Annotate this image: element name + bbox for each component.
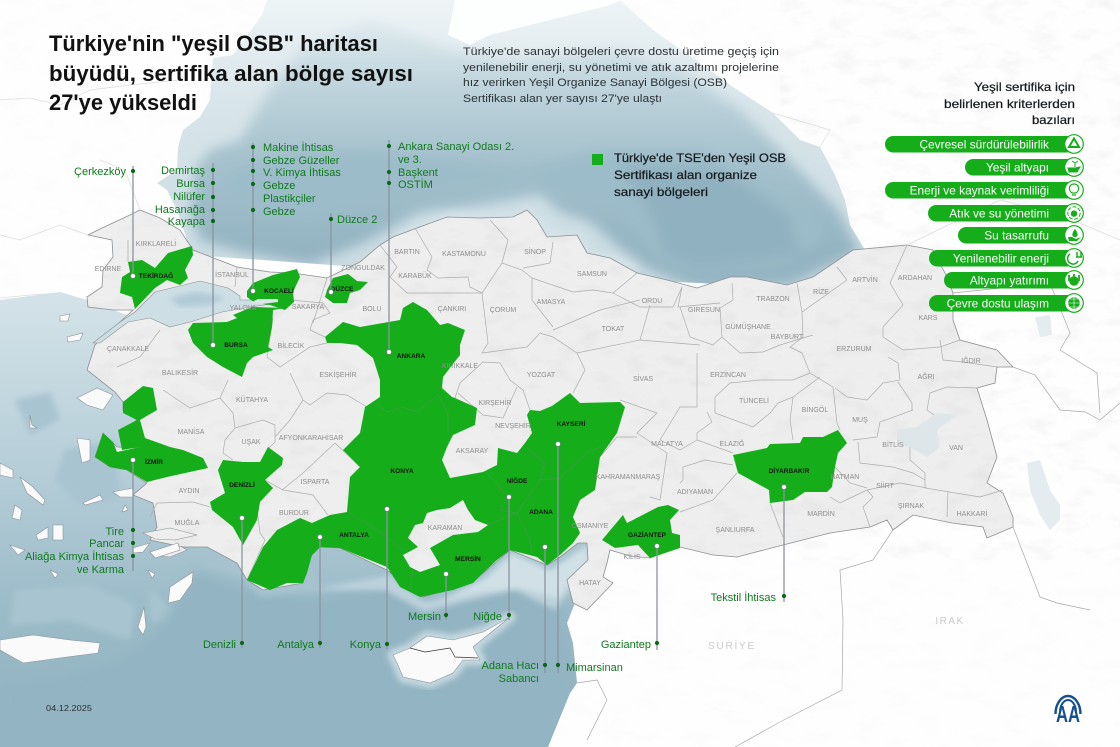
province names: MUŞ: [852, 417, 868, 424]
province names: MARDİN: [807, 509, 835, 518]
province names: NEVŞEHİR: [495, 421, 531, 430]
pill: Çevresel sürdürülebilirlik: [885, 135, 1083, 153]
intro text: yenilenebilir enerji, su yönetimi ve atık azaltımı projelerine: [463, 62, 779, 74]
pill: Çevre dostu ulaşım: [929, 294, 1083, 312]
province names: BATMAN: [831, 474, 859, 481]
province names: İSTANBUL: [215, 270, 249, 279]
pill: Yenilenebilir enerji: Yenilenebilir enerji: [953, 251, 1049, 265]
sea: Black Sea: [157, 0, 865, 290]
province names: AYDIN: [179, 488, 199, 495]
province names: UŞAK: [241, 439, 261, 446]
faint regional borders: [0, 80, 1120, 298]
OSB name labels: Demirtaş: [161, 165, 205, 177]
province location markers: [130, 274, 786, 576]
province names: SİNOP: [524, 247, 546, 256]
province names: ŞIRNAK: [898, 503, 924, 510]
OSB name labels: Kayapa: [168, 216, 206, 228]
province names: ÇORUM: [490, 307, 516, 314]
intro text: hız verirken Yeşil Organize Sanayi Bölgesi (OSB): [463, 77, 727, 89]
criteria heading: bazıları: [1032, 113, 1075, 127]
province names: ÇANAKKALE: [107, 346, 149, 353]
province names: BİLECİK: [278, 341, 305, 350]
province names: ARDAHAN: [898, 275, 932, 282]
logo: Anadolu Ajansı: AA: [1056, 701, 1080, 727]
province names: BAYBURT: [771, 334, 804, 341]
province: Düzce: [325, 274, 368, 303]
province names: OSMANİYE: [572, 521, 609, 530]
province names: KIRŞEHİR: [478, 398, 512, 407]
intro text: Türkiye'de sanayi bölgeleri çevre dostu üretime geçiş için: [463, 46, 779, 58]
pill: Altyapı yatırımı: Altyapı yatırımı: [970, 273, 1049, 287]
OSB name labels: Plastikçiler: [263, 193, 316, 205]
sea: Aegean and Mediterranean: [0, 292, 600, 747]
title: [49, 31, 413, 115]
OSB name labels: Gebze: [263, 180, 295, 192]
certified province labels: MERSİN: [455, 555, 481, 563]
province names: TUNCELİ: [739, 396, 769, 405]
pill: Atık ve su yönetimi: [928, 204, 1083, 222]
pill: Yenilenebilir enerji: [929, 249, 1083, 267]
province names: TRABZON: [756, 296, 790, 303]
province names: HATAY: [579, 580, 601, 587]
province: Diyarbakır: [733, 430, 847, 503]
neighbouring country borders: [577, 283, 1120, 747]
province: İzmir: [95, 386, 208, 482]
OSB name labels: Antalya: [277, 639, 315, 651]
pill: Altyapı yatırımı: [944, 271, 1083, 289]
OSB name labels: [25, 141, 776, 685]
Karaman label and inner borders: [250, 299, 600, 590]
province names: ERZURUM: [836, 346, 872, 353]
OSB name labels: Düzce 2: [337, 214, 377, 226]
OSB name labels: Konya: [350, 639, 382, 651]
OSB name labels: Tekstil İhtisas: [711, 591, 776, 604]
province: Bursa: [188, 307, 285, 377]
pill: Yeşil altyapı: Yeşil altyapı: [986, 160, 1049, 174]
OSB name labels: Başkent: [398, 167, 438, 179]
province names: BOLU: [362, 306, 382, 313]
province names: AKSARAY: [456, 448, 489, 455]
province: Kocaeli: [247, 269, 300, 310]
province names: AMASYA: [537, 299, 566, 306]
certified province labels: GAZİANTEP: [628, 531, 667, 539]
land: Türkiye base map: [86, 210, 1014, 610]
pill: Çevresel sürdürülebilirlik: Çevresel sürdürülebilirlik: [919, 137, 1049, 151]
province names: IRAK: [935, 616, 965, 627]
certified province labels: NİĞDE: [507, 476, 528, 485]
OSB name labels: Tire: [105, 526, 124, 538]
province names: SAMSUN: [577, 271, 607, 278]
OSB name labels: Mimarsinan: [566, 662, 623, 674]
pill: Su tasarrufu: Su tasarrufu: [984, 228, 1049, 242]
OSB name labels: Mersin: [408, 611, 441, 623]
intro text: [463, 46, 779, 105]
province names: BİNGÖL: [802, 405, 828, 414]
sea of Marmara: [93, 281, 280, 343]
province names: ARTVİN: [852, 275, 878, 284]
province names: SİİRT: [876, 481, 895, 490]
province names: BURDUR: [279, 510, 309, 517]
province names: KİLİS: [623, 552, 641, 561]
OSB name labels: V. Kimya İhtisas: [263, 166, 341, 179]
province names: ERZİNCAN: [710, 370, 746, 379]
province names: HAKKARİ: [957, 509, 987, 518]
logo: Anadolu Ajansı: [1056, 696, 1080, 727]
OSB name labels: Niğde: [473, 611, 502, 623]
province names: IĞDIR: [961, 356, 981, 365]
criteria heading: [944, 80, 1075, 127]
OSB name labels: Makine İhtisas: [263, 141, 334, 154]
pill: Enerji ve kaynak verimliliği: [885, 181, 1083, 199]
OSB name labels: Denizli: [203, 639, 236, 651]
legend: [592, 151, 786, 199]
date: 04.12.2025: [46, 703, 92, 713]
OSB name labels: Sabancı: [499, 673, 539, 685]
pill: Su tasarrufu: [958, 226, 1083, 244]
province names: ŞANLIURFA: [716, 527, 755, 534]
OSB name labels: OSTİM: [398, 178, 433, 191]
province: Denizli: [210, 447, 283, 545]
province names: GİRESUN: [688, 305, 720, 314]
OSB name labels: Hasanağa: [155, 204, 206, 216]
OSB name labels: Nilüfer: [173, 191, 205, 203]
OSB name labels: Bursa: [176, 178, 206, 190]
province names: KAHRAMANMARAŞ: [596, 474, 661, 481]
Karaman label and inner borders: KARAMAN: [428, 525, 462, 532]
OSB name labels: Gebze Güzeller: [263, 155, 340, 167]
province names: ISPARTA: [301, 479, 330, 486]
province: Tekirdağ: [120, 246, 193, 309]
pill: Atık ve su yönetimi: Atık ve su yönetimi: [949, 206, 1049, 220]
title: büyüdü, sertifika alan bölge sayısı: [49, 61, 413, 86]
OSB name labels: ve Karma: [77, 564, 125, 576]
province names: VAN: [949, 445, 963, 452]
OSB name labels: Gaziantep: [601, 639, 651, 651]
province: Gaziantep: [602, 505, 680, 558]
OSB name labels: Pancar: [89, 538, 124, 550]
province names: BALIKESİR: [162, 368, 198, 377]
legend: sanayi bölgeleri: [614, 185, 708, 199]
certified province labels: DİYARBAKIR: [769, 467, 810, 475]
province names: SİVAS: [633, 374, 653, 383]
OSB dots: [131, 144, 786, 667]
province names: ESKİŞEHİR: [319, 370, 357, 379]
pill: Enerji ve kaynak verimliliği: Enerji ve kaynak verimliliği: [910, 183, 1049, 197]
certified province labels: ANTALYA: [339, 532, 369, 539]
leader lines: [133, 140, 784, 673]
province names: KIRKLARELİ: [136, 239, 176, 248]
criteria heading: Yeşil sertifika için: [974, 80, 1075, 94]
province names: KASTAMONU: [442, 251, 486, 258]
certified province labels: ADANA: [529, 509, 553, 516]
legend: Türkiye'de TSE'den Yeşil OSB: [614, 151, 786, 165]
certified province labels: [139, 271, 810, 563]
criteria heading: belirlenen kriterlerden: [944, 97, 1075, 111]
provinces: Ankara, Konya, Antalya, Mersin, Niğde, Adana, Kayseri: [247, 302, 625, 597]
lakes: [897, 315, 1060, 530]
certified province labels: TEKİRDAĞ: [139, 271, 173, 280]
province names: KARABÜK: [398, 272, 432, 280]
province names: TOKAT: [602, 326, 625, 333]
province names: KIRIKKALE: [442, 363, 478, 370]
province names: BİTLİS: [882, 440, 904, 449]
province names: ÇANKIRI: [438, 306, 466, 313]
province names: BARTIN: [394, 249, 420, 256]
certified province labels: BURSA: [224, 342, 248, 349]
certified province labels: DENİZLİ: [229, 481, 255, 489]
province names: SURİYE: [708, 639, 756, 652]
certified province labels: İZMİR: [145, 458, 163, 466]
islands and Cyprus: [0, 314, 510, 683]
OSB name labels: ve 3.: [398, 154, 422, 166]
certified province labels: KAYSERİ: [557, 420, 586, 428]
certified province labels: KONYA: [390, 468, 414, 475]
province names: KÜTAHYA: [236, 396, 268, 404]
title: 27'ye yükseldi: [49, 90, 197, 115]
province names: MALATYA: [651, 441, 683, 448]
pill: Çevre dostu ulaşım: Çevre dostu ulaşım: [947, 296, 1049, 310]
legend: Sertifikası alan organize: [614, 168, 757, 182]
OSB name labels: Ankara Sanayi Odası 2.: [398, 141, 514, 153]
province names: MANİSA: [178, 427, 205, 436]
province names: MUĞLA: [175, 518, 200, 527]
map: provinces with green OSB certificates: [95, 246, 847, 597]
province names: AĞRI: [917, 372, 935, 381]
province names: GÜMÜŞHANE: [725, 323, 771, 331]
province names: ELAZIĞ: [720, 439, 744, 448]
province names: ZONGULDAK: [341, 265, 385, 272]
province names: YALOVA: [230, 305, 257, 312]
province names: SAKARYA: [292, 304, 325, 311]
certified province labels: ANKARA: [397, 353, 426, 360]
province names: [95, 239, 987, 652]
OSB name labels: Çerkezköy: [74, 166, 126, 178]
criteria pills: [885, 135, 1083, 312]
OSB name labels: Adana Hacı: [482, 660, 539, 672]
province names: ADIYAMAN: [677, 489, 713, 496]
OSB name labels: Aliağa Kimya İhtisas: [25, 550, 124, 563]
province names: AFYONKARAHİSAR: [279, 433, 343, 442]
intro text: Sertifikası alan yer sayısı 27'ye ulaştı: [463, 93, 662, 105]
province names: YOZGAT: [527, 372, 556, 379]
certified province labels: KOCAELİ: [264, 287, 294, 295]
province names: EDİRNE: [95, 264, 122, 273]
certified province labels: DÜZCE: [331, 284, 354, 293]
OSB name labels: Gebze: [263, 206, 295, 218]
title: Türkiye'nin "yeşil OSB" haritası: [49, 31, 378, 56]
province names: RİZE: [813, 287, 829, 296]
pill: Yeşil altyapı: [965, 158, 1083, 176]
province names: KARS: [918, 315, 938, 322]
land: Crimea: [448, 0, 622, 45]
province names: ORDU: [642, 298, 662, 305]
